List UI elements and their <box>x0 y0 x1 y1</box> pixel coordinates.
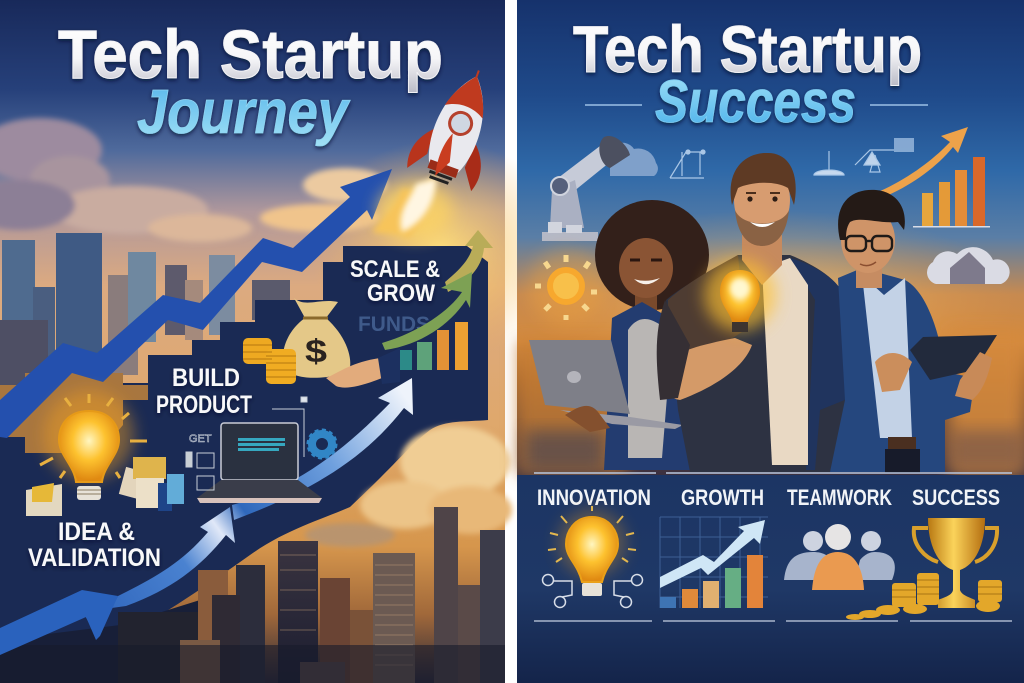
idea label: VALIDATION <box>28 544 161 572</box>
idea label: IDEA & <box>58 518 135 546</box>
trophy <box>914 518 997 608</box>
glasses <box>846 236 892 251</box>
clouds: upper left <box>0 118 252 242</box>
hair <box>731 153 796 205</box>
pillar: success <box>846 485 1002 620</box>
lower rising arrow <box>0 378 413 655</box>
left teammate <box>784 531 835 580</box>
hands <box>565 406 610 432</box>
smile <box>860 262 876 266</box>
jacket <box>604 302 694 470</box>
glowing lightbulb <box>704 259 776 332</box>
rocket <box>372 58 513 238</box>
eyes and smile <box>746 193 780 227</box>
green arrow <box>382 272 472 350</box>
chart: small bar chart <box>913 157 990 228</box>
title line one: Tech Startup <box>58 16 443 93</box>
rocket flame <box>372 172 453 238</box>
person: woman with laptop <box>529 200 709 470</box>
neck and face <box>619 238 673 318</box>
skyline: upper left <box>0 233 290 390</box>
beard <box>735 210 789 246</box>
person: man with tablet <box>830 190 997 473</box>
icon: white cloud house <box>927 247 1010 284</box>
title line one: Tech Startup <box>573 12 922 86</box>
panel: tech startup journey <box>0 0 570 683</box>
central glow <box>520 210 1020 390</box>
money bag: $ <box>305 333 327 369</box>
blue jacket right <box>790 258 857 470</box>
hair <box>595 200 709 310</box>
skyline: dark bottom fade <box>0 645 505 683</box>
pillar: growth <box>660 485 768 608</box>
build label <box>156 364 252 419</box>
laptop <box>197 423 322 503</box>
sleeve <box>657 300 690 400</box>
olive arrow <box>445 230 493 292</box>
top rules <box>534 472 1012 474</box>
head <box>841 207 895 273</box>
heart logo <box>567 371 581 383</box>
build label: BUILD <box>172 364 240 392</box>
growth bars <box>660 555 763 608</box>
shirt <box>862 275 912 438</box>
big blue zigzag arrow <box>0 169 392 438</box>
warm step behind lightbulb <box>0 373 148 453</box>
rocket body <box>404 58 513 194</box>
skyline: lower city <box>118 507 505 683</box>
stage: funding money bag <box>243 298 400 388</box>
handing hand and sleeve <box>326 348 400 388</box>
dark stepped staircase <box>0 246 488 650</box>
laptop back <box>529 340 630 414</box>
wireframe icons: GET <box>189 433 212 445</box>
title: tech startup journey <box>58 16 443 147</box>
panel: tech startup success <box>517 0 1024 683</box>
title: tech startup success <box>573 12 928 135</box>
sticky notes <box>26 457 184 516</box>
build label: PRODUCT <box>156 391 252 419</box>
scale label: GROW <box>367 280 435 307</box>
hands <box>875 353 912 392</box>
title line two: Success <box>655 68 856 135</box>
icon: glowing sun gear <box>528 248 604 324</box>
bottom rules <box>534 620 1012 622</box>
cream t-shirt <box>762 258 808 465</box>
circuit nodes <box>542 574 642 608</box>
sky background <box>0 0 505 683</box>
stage: build product <box>156 364 336 503</box>
stage: scale and grow <box>350 230 493 370</box>
right teammate <box>855 531 895 580</box>
sunset glow <box>310 140 570 360</box>
right orange city glow <box>950 330 1024 475</box>
panel: bottom icons strip <box>517 473 1024 683</box>
brown shoulder highlight <box>668 255 745 380</box>
clouds: behind rocket <box>260 168 387 232</box>
pillar: innovation <box>537 485 651 608</box>
gear icon <box>308 430 336 458</box>
money bag <box>283 298 350 378</box>
stage: idea and validation <box>26 390 184 572</box>
wireframe icons <box>186 397 307 490</box>
grey top <box>628 319 672 458</box>
growth label: GROWTH <box>681 485 764 510</box>
strip background <box>517 475 1024 683</box>
lightbulb <box>40 390 147 500</box>
title line two: Journey <box>137 78 351 147</box>
person: man holding lightbulb <box>657 153 857 472</box>
neck <box>856 262 882 288</box>
left orange city glow <box>517 340 627 475</box>
coin stacks <box>846 573 1002 620</box>
dark city behind lower arrow <box>0 600 200 683</box>
icon: rising orange arrow <box>878 127 968 197</box>
laptop base <box>560 410 683 429</box>
icon: tech diagrams <box>670 138 914 178</box>
success label: SUCCESS <box>912 485 1000 510</box>
growth arrow <box>660 520 765 588</box>
chart grid <box>660 517 768 608</box>
innovation label: INNOVATION <box>537 485 651 510</box>
innovation bulb <box>548 506 636 596</box>
coin stacks <box>243 338 296 384</box>
trousers <box>885 449 920 473</box>
right background <box>517 0 1024 475</box>
clouds: lower right <box>305 426 512 547</box>
idea label <box>28 518 161 572</box>
blazer <box>830 268 975 472</box>
jacket torso <box>666 255 857 472</box>
small bar chart <box>398 322 468 370</box>
title side rules <box>585 104 928 106</box>
tablet <box>910 335 997 380</box>
belt <box>888 437 916 449</box>
faded funds label: FUNDS <box>358 313 430 336</box>
hair <box>838 190 905 240</box>
scale label: SCALE & <box>350 256 440 283</box>
scale label <box>350 256 440 307</box>
centre teammate <box>812 524 864 590</box>
building window stripes <box>280 555 413 665</box>
forearm and hand <box>660 338 752 400</box>
pillar: teamwork <box>784 485 895 590</box>
icon: robot arm with cloud <box>542 136 658 241</box>
head <box>734 162 790 238</box>
teamwork label: TEAMWORK <box>787 485 892 510</box>
neck <box>742 235 782 285</box>
coin stack edges <box>892 580 1002 597</box>
